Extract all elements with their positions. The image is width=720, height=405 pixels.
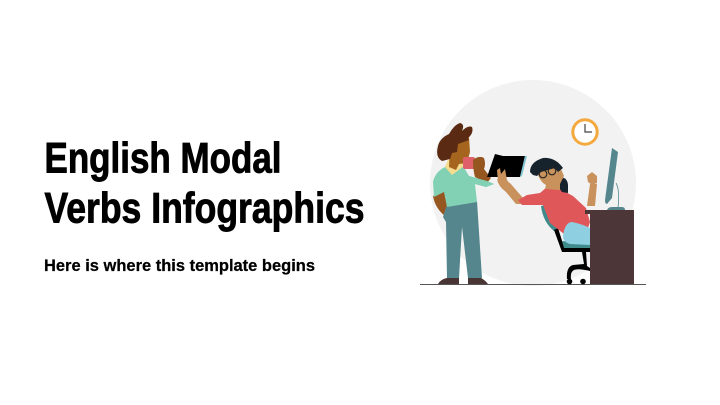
- woman at chair: [497, 158, 597, 284]
- title: Verbs Infographics: [44, 184, 364, 232]
- monitor: [605, 148, 625, 210]
- illustration: coworkers at a desk: [420, 80, 646, 286]
- icon: wall clock: [573, 120, 597, 144]
- title: English Modal: [44, 134, 282, 182]
- book: [487, 154, 527, 177]
- subtitle: Here is where this template begins: [44, 257, 315, 275]
- desk: [585, 210, 634, 284]
- title: [44, 134, 364, 232]
- background circle: [430, 80, 636, 286]
- ground line: [420, 284, 646, 285]
- chair: [541, 204, 590, 284]
- man standing with mug: [433, 123, 494, 284]
